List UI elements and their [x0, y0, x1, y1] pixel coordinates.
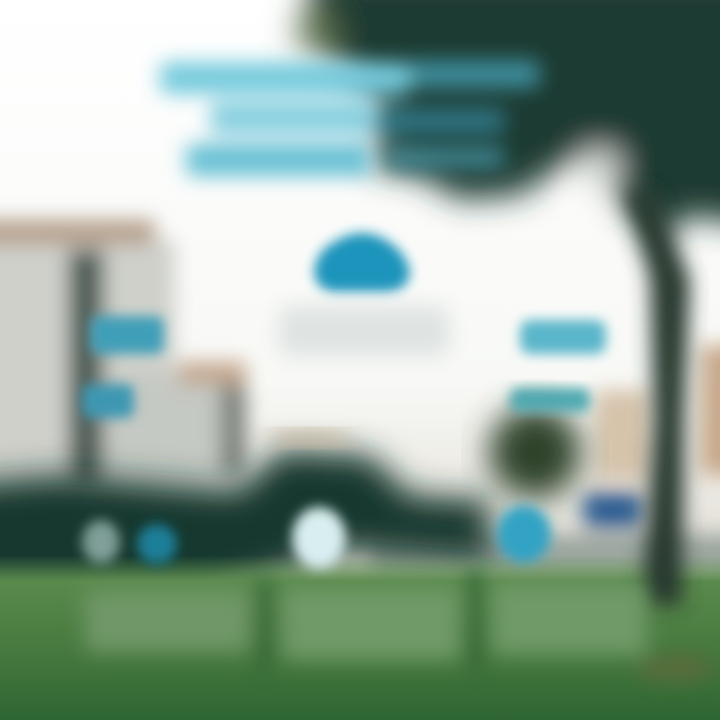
left callout line 1	[90, 316, 164, 354]
dark gap between columns	[258, 580, 272, 670]
column 3 text	[492, 583, 647, 655]
building wall	[0, 240, 175, 485]
title line 2	[210, 102, 375, 134]
building roof	[0, 220, 155, 244]
title line 3 over tree	[385, 148, 505, 168]
column 2 text	[282, 588, 460, 660]
icon: white circle	[292, 507, 346, 569]
right callout block	[520, 320, 606, 354]
bottom text columns	[85, 570, 715, 680]
blue vehicle	[583, 492, 643, 528]
building dark column	[68, 250, 104, 485]
lower wing shadow	[220, 385, 246, 475]
left callout line 2	[82, 384, 134, 418]
building left	[0, 220, 246, 485]
right lower heading	[510, 388, 590, 412]
title line 2 over tree	[375, 108, 505, 134]
far right building	[700, 345, 720, 475]
icon: teal circle	[497, 505, 551, 563]
center caption block	[278, 305, 450, 357]
reddish ground patch	[635, 656, 715, 680]
icon: small teal circle	[137, 524, 177, 564]
column 1 text	[85, 590, 250, 652]
dark tree line	[0, 450, 490, 600]
grass lawn	[0, 555, 720, 720]
icon: small pale circle	[82, 520, 120, 564]
title line 3	[186, 144, 371, 176]
lower wing roof	[178, 362, 246, 384]
icon: teal cloud	[314, 233, 410, 292]
dark gap between columns	[468, 570, 482, 670]
tree canopy	[296, 0, 720, 240]
right distant building	[370, 345, 720, 575]
lower building wing	[110, 375, 245, 485]
right small tree	[489, 406, 581, 498]
distant tree roofline	[265, 431, 355, 445]
distant building wall	[595, 390, 650, 480]
tree trunk	[625, 190, 690, 605]
title text block	[160, 60, 540, 176]
street strip	[370, 535, 720, 575]
title line 1 over tree	[410, 60, 540, 88]
title line 1	[160, 62, 410, 94]
